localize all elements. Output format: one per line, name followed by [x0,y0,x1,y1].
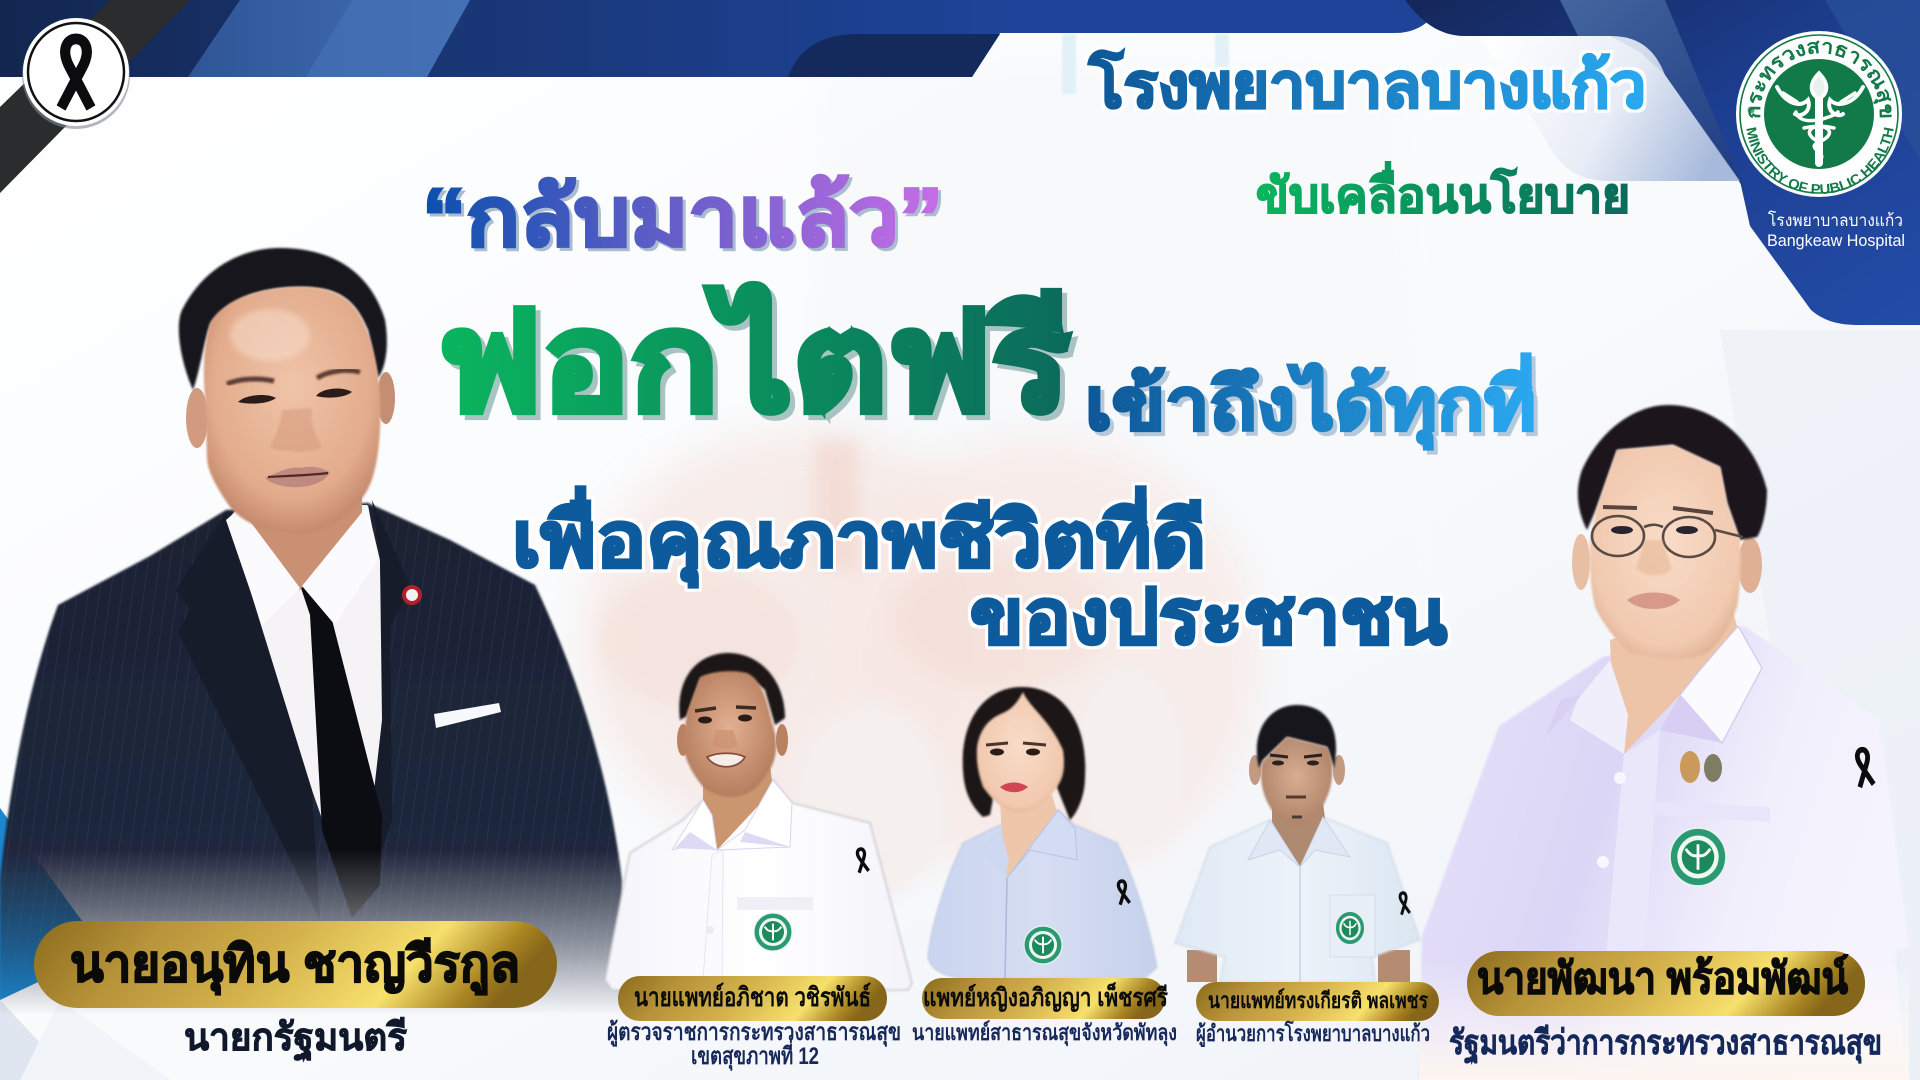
hair [963,687,1085,820]
hospital logo: กระทรวงสาธารณสุข [1748,40,1892,118]
header band [0,0,1440,77]
name pill: Pattana [1467,951,1865,1016]
glasses [1592,516,1743,557]
ears [677,724,689,756]
nose [1636,540,1672,576]
logo caption: โรงพยาบาลบางแก้ว [1768,210,1903,230]
translucent panel behind title [1480,36,1740,181]
face [204,287,380,533]
neck [1610,600,1738,754]
role: prime minister: นายกรัฐมนตรี [184,1017,408,1062]
hair [1257,705,1336,768]
mouth [1627,592,1680,609]
hospital name heading: โรงพยาบาลบางแก้ว [1088,49,1646,121]
fade [1419,960,1909,1080]
portrait: deputy minister [1419,405,1909,1080]
tie [300,580,382,918]
name pill: Anutin: นายอนุทิน ชาญวีรกูล [70,936,520,995]
face [1261,737,1332,825]
shirt [1175,817,1420,982]
forehead highlight [230,309,310,361]
pocket square [434,703,501,728]
mourning ribbon badge [22,18,130,129]
role: inspector general: เขตสุขภาพที่ 12 [691,1038,819,1072]
ears [1572,534,1590,590]
role: provincial health officer: นายแพทย์สาธารณสุขจังหวัดพัทลุง [912,1020,1177,1047]
ears [186,388,208,448]
eyes [1611,526,1633,534]
headline: quality of life: เพื่อคุณภาพชีวิตที่ดี [512,486,1206,588]
portrait: prime minister [0,248,625,1030]
icon: caduceus [1777,73,1863,163]
placket [1595,730,1660,1080]
lapels [176,512,320,920]
hair [1578,405,1767,540]
role: inspector general [607,1019,901,1072]
ghost doctor in background [780,34,1440,620]
role: hospital director: ผู้อำนวยการโรงพยาบาลบางแก้ว [1196,1020,1430,1048]
hospital logo [1736,31,1902,197]
lapel pin [402,585,422,605]
portrait: inspector general [605,653,912,990]
name pill: Songkiat [1196,982,1439,1021]
logo caption: Bangkeaw Hospital [1767,231,1905,250]
arms [1187,950,1217,982]
ghost kidney and hands [580,430,1260,900]
headline: back again: “กลับมาแล้ว” [422,172,943,263]
right blue panel [1405,0,1920,325]
suit [0,503,625,1030]
face [977,692,1064,813]
headline: of the people: ของประชาชน [970,575,1447,660]
name pill: Songkiat: นายแพทย์ทรงเกียรติ พลเพชร [1208,988,1428,1013]
face [1590,445,1741,660]
brows [1603,507,1713,513]
headline: accessible everywhere: เข้าถึงได้ทุกที่ [1085,353,1536,450]
bottom-left triangles [0,808,85,1000]
collar wings [226,508,300,625]
ears [1249,755,1261,785]
logo caption [1767,210,1905,250]
pins [1680,751,1700,783]
portrait: hospital director [1175,705,1420,982]
name pill: Anutin [34,921,557,1008]
hospital logo: MINISTRY OF PUBLIC HEALTH [1746,127,1894,194]
face [683,671,776,797]
name pill: Apinya [922,978,1168,1019]
shirt [231,505,382,818]
role: inspector general: ผู้ตรวจราชการกระทรวงสาธารณสุข [607,1019,901,1048]
name pill: Apinya: แพทย์หญิงอภิญญา เพ็ชรศรี [923,982,1168,1012]
name pill: Pattana: นายพัฒนา พร้อมพัฒน์ [1477,954,1849,1003]
hair [179,248,387,390]
portrait: provincial health officer [928,687,1157,978]
buttons, pocket [1614,772,1626,784]
name pill: Apichat: นายแพทย์อภิชาต วชิรพันธ์ [634,982,871,1012]
brows eyes nose mouth [227,370,360,384]
name pill: Apichat [618,976,887,1021]
subheading: policy: ขับเคลื่อนนโยบาย [1256,161,1630,223]
collar [1545,695,1624,754]
mourning sash [0,0,190,193]
hair [679,653,785,725]
headline: free dialysis: ฟอกไตฟรี [438,284,1070,440]
neck [236,480,362,590]
